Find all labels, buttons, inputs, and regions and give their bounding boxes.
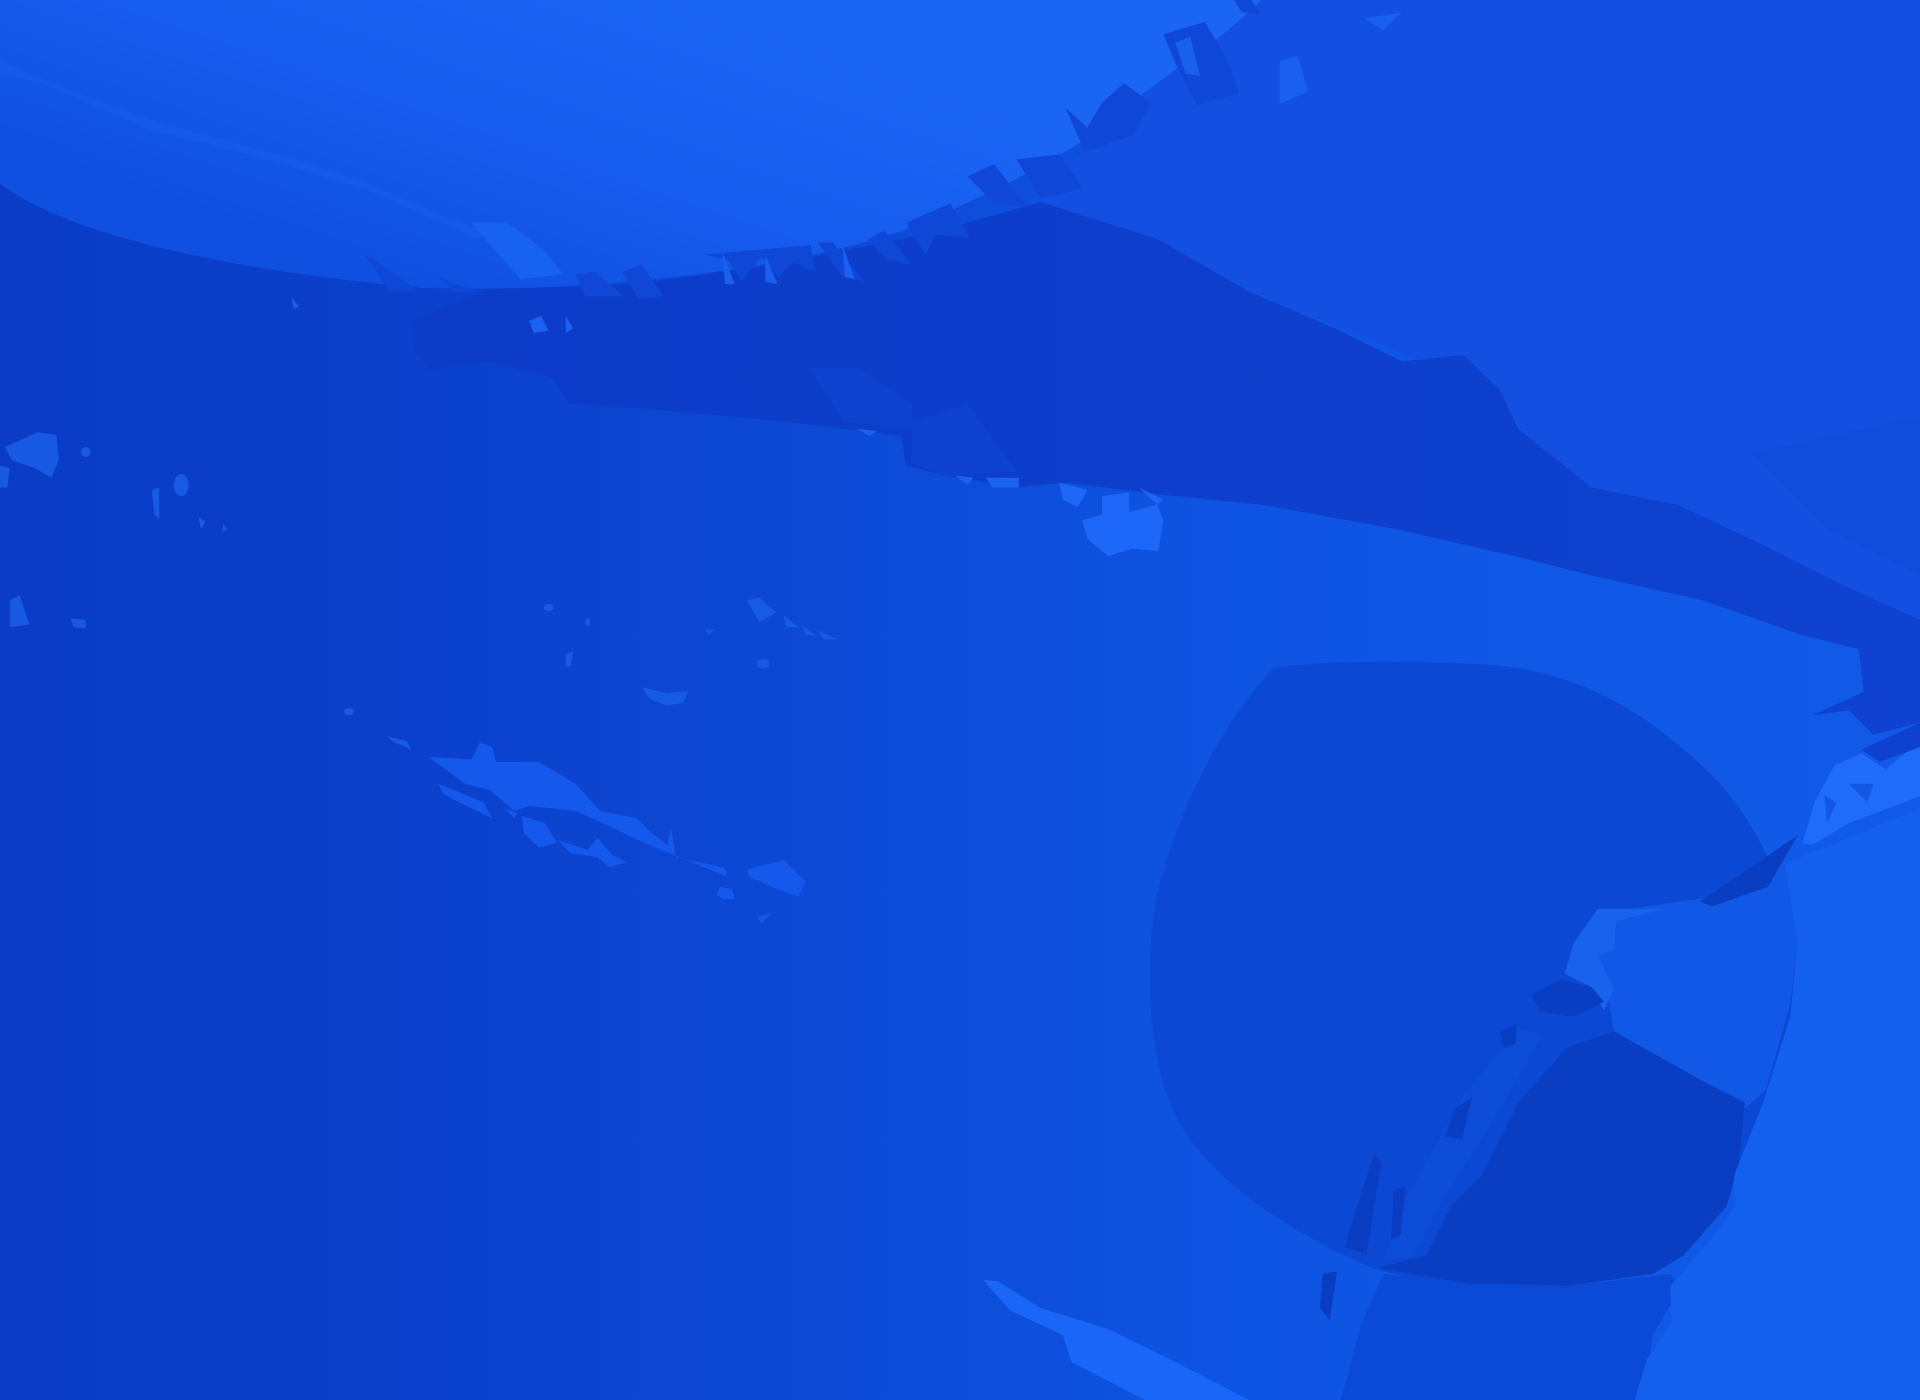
top left bright arc	[0, 0, 1261, 289]
scattered left flecks	[0, 432, 838, 750]
small band flecks	[291, 298, 1019, 487]
light upper right circle segment	[1565, 867, 1798, 1108]
splash dark fragments	[1824, 784, 1873, 823]
arc highlight end	[471, 223, 563, 279]
brush trail below circle	[1341, 1274, 1678, 1400]
splash near band edge	[1059, 483, 1163, 556]
large circle brush	[1150, 662, 1798, 1285]
lower island flecks	[438, 784, 806, 924]
lighter stripe between segments	[1384, 1029, 1543, 1262]
top right region	[1029, 0, 1920, 637]
right bright panel	[1635, 808, 1920, 1400]
arc ragged brush fringe	[365, 0, 1261, 299]
right faint patch	[1751, 416, 1920, 576]
dark brush band	[410, 202, 1920, 735]
right splash	[1802, 741, 1920, 845]
dark brush flecks	[1320, 835, 1798, 1320]
arc fringe inner flecks	[722, 12, 1402, 284]
highlight brush edge	[1565, 909, 1665, 1010]
central island flecks	[429, 742, 727, 876]
band lighter patches	[808, 367, 1016, 475]
bottom bright brush	[983, 1280, 1249, 1400]
dark band fragments at right edge	[1861, 723, 1920, 762]
arc highlight streak	[0, 61, 490, 239]
dark lower circle segment	[1378, 1031, 1745, 1286]
